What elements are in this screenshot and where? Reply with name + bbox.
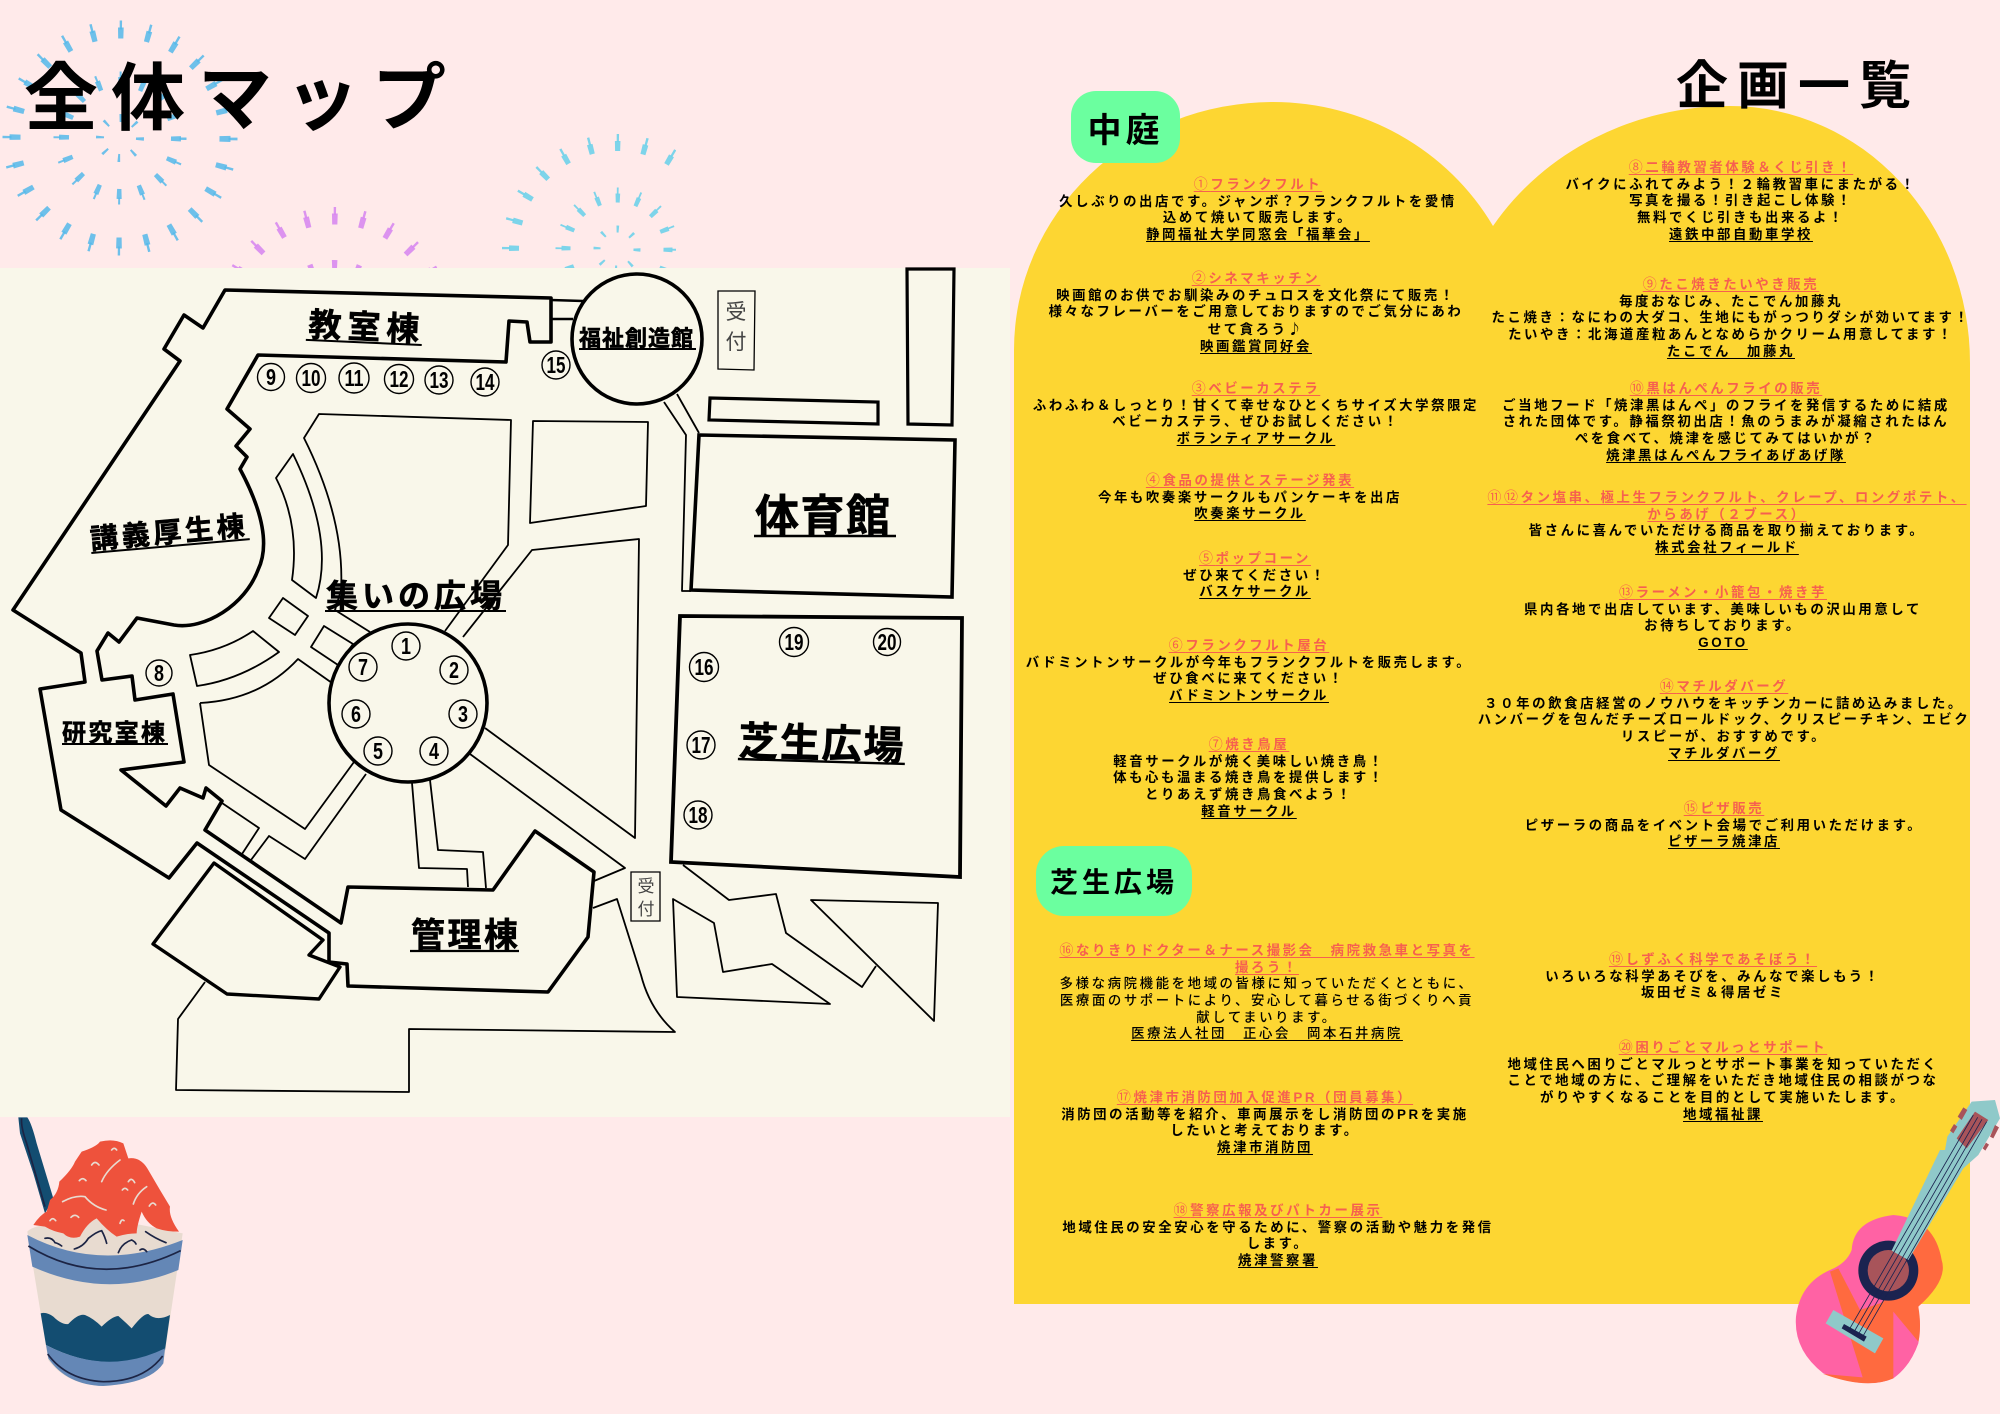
marker numbers: 6 xyxy=(351,701,361,727)
event 8 xyxy=(1565,157,1917,242)
event 9 xyxy=(1492,274,1970,359)
icon: purple firework xyxy=(220,211,448,439)
event 7: ⑦焼き鳥屋 xyxy=(1209,734,1289,754)
event 20: ことで地域の方に、ご理解をいただき地域住民の相談がつな xyxy=(1508,1073,1938,1088)
reception box upper: 受 xyxy=(726,301,746,324)
marker numbers: 3 xyxy=(458,701,468,727)
event 7: 軽音サークル xyxy=(1201,804,1297,819)
heading pill: lawn plaza xyxy=(1036,846,1192,916)
marker numbers: 16 xyxy=(694,654,714,680)
event 17: 焼津市消防団 xyxy=(1217,1140,1313,1155)
map labels xyxy=(62,306,906,955)
event 18: します。 xyxy=(1247,1236,1309,1251)
event 5 xyxy=(1183,548,1327,599)
event 10: 焼津黒はんぺんフライあげあげ隊 xyxy=(1606,448,1846,463)
event 1 xyxy=(1059,174,1457,242)
marker numbers: 4 xyxy=(429,738,439,764)
event 9: ⑨たこ焼きたいやき販売 xyxy=(1643,274,1819,294)
marker numbers: 12 xyxy=(390,366,408,392)
event 19: ⑲しずふく科学であそぼう！ xyxy=(1609,949,1817,969)
event 7: とりあえず焼き鳥食べよう！ xyxy=(1145,787,1353,802)
building: welfare creation hall xyxy=(572,274,702,404)
event 3: ベビーカステラ、ぜひお試しください！ xyxy=(1112,414,1400,429)
event 20: がりやすくなることを目的として実施いたします。 xyxy=(1540,1090,1906,1105)
reception box lower: 受 xyxy=(638,877,654,896)
event 10: された団体です。静福祭初出店！魚のうまみが凝縮されたはん xyxy=(1503,414,1949,429)
building: connector lines xyxy=(551,300,583,319)
event 3: ボランティアサークル xyxy=(1177,431,1335,446)
label: welfare hall: 福祉創造館 xyxy=(579,326,693,351)
marker numbers: 2 xyxy=(449,657,459,683)
event 20: ⑳困りごとマルっとサポート xyxy=(1619,1037,1827,1057)
label: gymnasium: 体育館 xyxy=(755,492,890,541)
event 9: たいやき：北海道産粒あんとなめらかクリーム用意してます！ xyxy=(1508,327,1954,342)
event 11 12: ⑪⑫タン塩串、極上生フランクフルト、クレープ、ロングポテト、 xyxy=(1487,487,1967,507)
event 11 12: からあげ（２ブース） xyxy=(1647,507,1807,522)
marker numbers: 10 xyxy=(302,365,320,391)
event 4: 吹奏楽サークル xyxy=(1194,506,1306,521)
label: classroom: 教室棟 xyxy=(308,306,420,348)
event 10: ご当地フード「焼津黒はんぺ」のフライを発信するために結成 xyxy=(1502,398,1950,413)
icon: cyan firework xyxy=(502,134,676,268)
marker numbers: 7 xyxy=(358,654,368,680)
marker numbers: 14 xyxy=(476,369,495,395)
event 16: 医療面のサポートにより、安心して暮らせる街づくりへ貢 xyxy=(1060,993,1474,1008)
icon: shaved ice cup xyxy=(18,1117,183,1386)
event 6 xyxy=(1026,635,1472,703)
event 3 xyxy=(1033,378,1479,446)
label: lecture hall: 講義厚生棟 xyxy=(89,511,246,555)
event 14: リスピーが、おすすめです。 xyxy=(1621,729,1827,744)
event 1: 静岡福祉大学同窓会「福華会」 xyxy=(1146,227,1370,242)
marker numbers: 11 xyxy=(344,365,364,391)
event 16: 献してまいります。 xyxy=(1196,1010,1338,1025)
label: lawn plaza: 芝生広場 xyxy=(738,720,904,769)
event 2 xyxy=(1048,268,1463,354)
event 14: ハンバーグを包んだチーズロールドック、クリスピーチキン、エビク xyxy=(1478,712,1970,727)
marker numbers: 19 xyxy=(784,629,804,655)
event 2: せて貪ろう♪ xyxy=(1208,319,1304,339)
small rectangle building xyxy=(709,398,878,424)
event 10: ⑩黒はんぺんフライの販売 xyxy=(1630,378,1822,398)
event 7 xyxy=(1113,734,1385,819)
tall rectangle building xyxy=(907,269,954,425)
event 11 12: 株式会社フィールド xyxy=(1655,540,1799,555)
marker numbers: 13 xyxy=(430,367,448,393)
reception box upper xyxy=(718,291,755,370)
event 6: ⑥フランクフルト屋台 xyxy=(1169,635,1329,655)
event 15: ⑮ピザ販売 xyxy=(1684,798,1764,818)
event 8: 無料でくじ引きも出来るよ！ xyxy=(1637,210,1845,225)
event 16: 撮ろう！ xyxy=(1235,960,1299,975)
label: research building: 研究室棟 xyxy=(62,720,165,747)
event 17: したいと考えております。 xyxy=(1170,1123,1360,1138)
marker numbers: 1 xyxy=(401,633,411,659)
event 5: ぜひ来てください！ xyxy=(1183,568,1327,583)
event 7: 体も心も温まる焼き鳥を提供します！ xyxy=(1113,770,1385,785)
event 19: 坂田ゼミ＆得居ゼミ xyxy=(1641,985,1785,1000)
event 1: 込めて焼いて販売します。 xyxy=(1163,210,1353,225)
event 16: ⑯なりきりドクター＆ナース撮影会 病院救急車と写真を xyxy=(1059,940,1475,960)
event 17: 消防団の活動等を紹介、車両展示をし消防団のPRを実施 xyxy=(1061,1107,1469,1122)
marker numbers: 18 xyxy=(688,802,708,828)
event 13: お待ちしております。 xyxy=(1644,618,1802,633)
label: gathering plaza: 集いの広場 xyxy=(326,578,502,614)
reception box upper: 付 xyxy=(726,331,746,354)
event 1: ①フランクフルト xyxy=(1194,174,1322,194)
event 13 xyxy=(1524,582,1922,650)
event 18: 地域住民の安全安心を守るために、警察の活動や魅力を発信 xyxy=(1062,1220,1494,1235)
event 19: いろいろな科学あそびを、みんなで楽しもう！ xyxy=(1545,969,1881,984)
event 13: ⑬ラーメン・小籠包・焼き芋 xyxy=(1619,582,1827,602)
heading pill: courtyard: 中庭 xyxy=(1088,112,1164,150)
numbered map markers xyxy=(146,351,900,829)
marker numbers: 9 xyxy=(266,364,276,390)
event 14: マチルダバーグ xyxy=(1668,746,1780,761)
event 16: 多様な病院機能を地域の皆様に知っていただくとともに、 xyxy=(1060,976,1474,991)
event 15 xyxy=(1525,798,1923,849)
event 18 xyxy=(1062,1200,1494,1268)
event 13: 県内各地で出店しています、美味しいもの沢山用意して xyxy=(1524,602,1922,617)
thin paths and grounds xyxy=(176,394,938,1092)
event 8: ⑧二輪教習者体験＆くじ引き！ xyxy=(1629,157,1853,177)
building: gymnasium xyxy=(691,435,955,597)
event 4: 今年も吹奏楽サークルもパンケーキを出店 xyxy=(1098,490,1402,505)
event 18: ⑱警察広報及びパトカー展示 xyxy=(1174,1200,1382,1220)
event 10: ぺを食べて、焼津を感じてみてはいかが？ xyxy=(1575,431,1877,446)
label: administration: 管理棟 xyxy=(411,917,518,955)
marker numbers: 20 xyxy=(878,629,896,655)
event 3: ふわふわ＆しっとり！甘くて幸せなひとくちサイズ大学祭限定 xyxy=(1033,398,1479,413)
event 20: 地域福祉課 xyxy=(1683,1107,1763,1122)
event 15: ピザーラの商品をイベント会場でご利用いただけます。 xyxy=(1525,818,1923,833)
event 1: 久しぶりの出店です。ジャンボ？フランクフルトを愛情 xyxy=(1059,194,1457,209)
event 3: ③ベビーカステラ xyxy=(1192,378,1320,398)
event 2: 映画館のお供でお馴染みのチュロスを文化祭にて販売！ xyxy=(1056,288,1456,303)
reception box lower: 付 xyxy=(638,900,654,919)
event 14 xyxy=(1478,676,1970,761)
title: overall map: 全体マップ xyxy=(24,57,459,140)
event 20 xyxy=(1507,1037,1939,1122)
event 8: バイクにふれてみよう！２輪教習車にまたがる！ xyxy=(1565,177,1917,192)
heading pill: courtyard xyxy=(1071,91,1180,163)
event 16: 医療法人社団 正心会 岡本石井病院 xyxy=(1131,1026,1403,1041)
event 6: バドミントンサークル xyxy=(1169,688,1329,703)
marker numbers: 17 xyxy=(692,732,710,758)
icon: guitar xyxy=(1796,1100,2000,1384)
event 20: 地域住民へ困りごとマルっとサポート事業を知っていただく xyxy=(1507,1057,1939,1072)
area: gathering plaza circle xyxy=(329,624,487,782)
event 9: たこでん 加藤丸 xyxy=(1667,344,1795,359)
event 9: 毎度おなじみ、たこでん加藤丸 xyxy=(1619,294,1843,309)
event 19 xyxy=(1545,949,1881,1000)
event 2: 様々なフレーバーをご用意しておりますのでご気分にあわ xyxy=(1049,304,1463,319)
area: lawn plaza xyxy=(671,616,962,877)
marker numbers xyxy=(154,352,896,828)
event 11 12 xyxy=(1487,487,1967,555)
event 17: ⑰焼津市消防団加入促進PR（団員募集） xyxy=(1117,1087,1413,1107)
event 15: ピザーラ焼津店 xyxy=(1668,834,1780,849)
event 18: 焼津警察署 xyxy=(1238,1253,1318,1268)
event 14: ３０年の飲食店経営のノウハウをキッチンカーに詰め込みました。 xyxy=(1484,696,1964,711)
event 2: 映画鑑賞同好会 xyxy=(1200,339,1312,354)
event 11 12: 皆さんに喜んでいただける商品を取り揃えております。 xyxy=(1529,523,1925,538)
event 6: ぜひ食べに来てください！ xyxy=(1153,671,1345,686)
event 14: ⑭マチルダバーグ xyxy=(1660,676,1788,696)
event 5: ⑤ポップコーン xyxy=(1199,548,1311,568)
building: classroom and lecture wing xyxy=(13,290,594,992)
event 6: バドミントンサークルが今年もフランクフルトを販売します。 xyxy=(1026,655,1472,670)
event 13: GOTO xyxy=(1698,635,1748,650)
event 8: 遠鉄中部自動車学校 xyxy=(1669,227,1813,242)
event 10 xyxy=(1502,378,1950,463)
event 4: ④食品の提供とステージ発表 xyxy=(1146,470,1354,490)
marker numbers: 5 xyxy=(373,738,383,764)
title: event list: 企画一覧 xyxy=(1676,58,1920,116)
reception box lower xyxy=(631,872,660,921)
icon: blue firework xyxy=(7,25,233,251)
event 8: 写真を撮る！引き起こし体験！ xyxy=(1629,193,1853,208)
marker numbers: 8 xyxy=(154,660,164,686)
heading pill: lawn plaza: 芝生広場 xyxy=(1050,867,1178,898)
event 2: ②シネマキッチン xyxy=(1192,268,1320,288)
building: lower left wing xyxy=(153,863,340,999)
marker numbers: 15 xyxy=(546,352,566,378)
background fireworks xyxy=(2,20,676,268)
event 16 xyxy=(1059,940,1475,1041)
event 5: バスケサークル xyxy=(1199,584,1311,599)
event 9: たこ焼き：なにわの大ダコ、生地にもがっつりダシが効いてます！ xyxy=(1492,310,1970,325)
event 7: 軽音サークルが焼く美味しい焼き鳥！ xyxy=(1113,754,1385,769)
event 17 xyxy=(1061,1087,1469,1155)
event 4 xyxy=(1098,470,1402,521)
